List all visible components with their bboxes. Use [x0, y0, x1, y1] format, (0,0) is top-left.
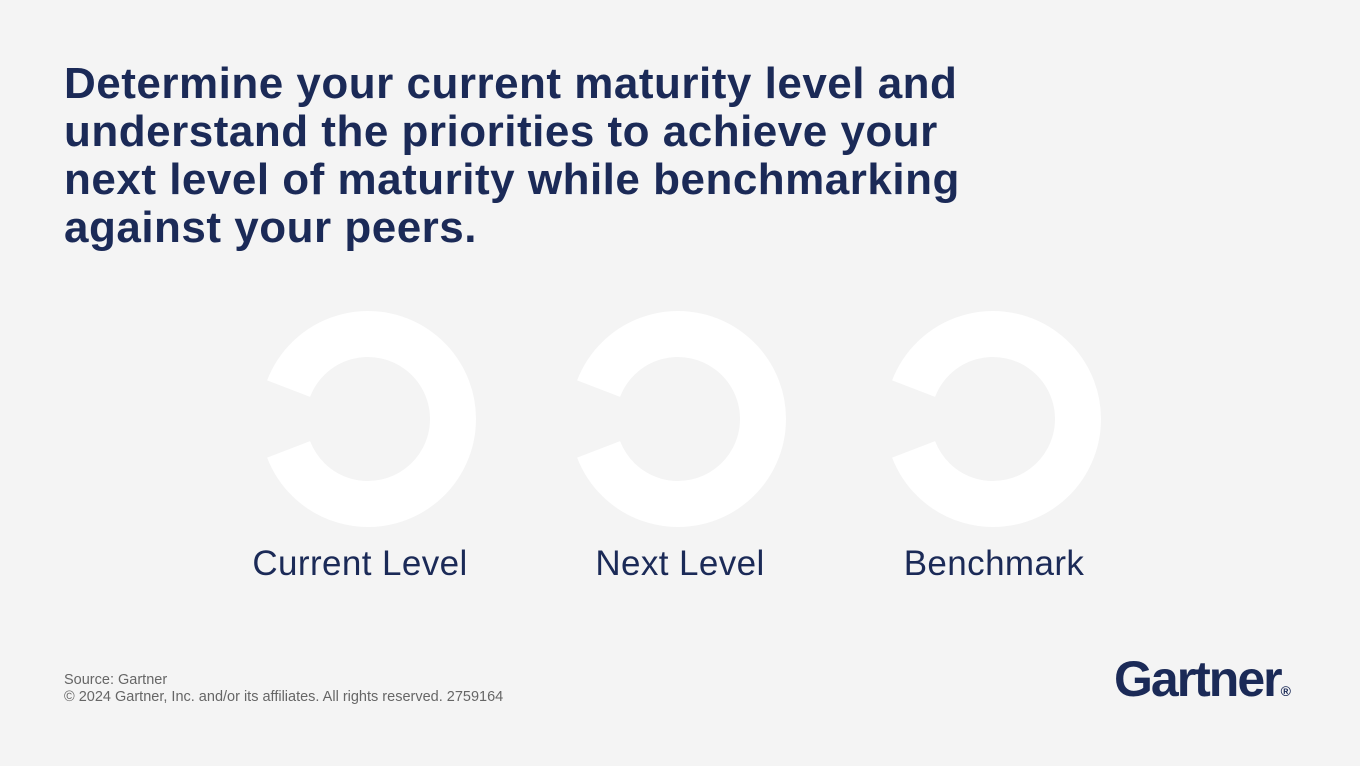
label: benchmark: Benchmark: [904, 544, 1084, 583]
title: Determine your current maturity level and: [64, 59, 957, 108]
ring: benchmark: [914, 334, 1078, 504]
label: current level: Current Level: [252, 544, 468, 583]
source text: © 2024 Gartner, Inc. and/or its affiliates. All rights reserved. 2759164: [64, 689, 503, 705]
source text: [64, 672, 503, 705]
source text: Source: Gartner: [64, 672, 167, 688]
logo: Gartner®: [1114, 651, 1291, 707]
title: [64, 59, 960, 252]
ring: current level: [289, 334, 453, 504]
label: next level: Next Level: [595, 544, 765, 583]
ring: next level: [599, 334, 763, 504]
title: understand the priorities to achieve your: [64, 107, 938, 156]
title: next level of maturity while benchmarking: [64, 155, 960, 204]
title: against your peers.: [64, 203, 477, 252]
